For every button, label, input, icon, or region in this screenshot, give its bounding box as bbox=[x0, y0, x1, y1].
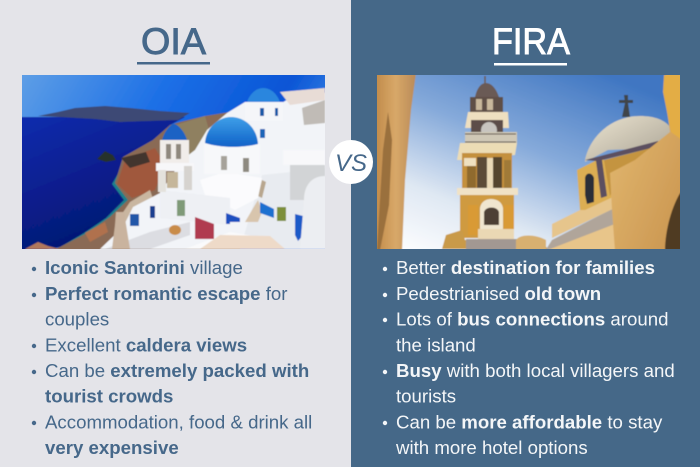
text block: Fira bullet list: tourists bbox=[396, 386, 456, 407]
large blue dome church bbox=[204, 144, 260, 174]
parasol bbox=[112, 212, 130, 249]
heading: FIRA: FIRA bbox=[492, 20, 570, 62]
bell tower bbox=[160, 140, 189, 164]
text block: Oia bullet list: tourist crowds bbox=[45, 386, 173, 407]
VS badge: VS bbox=[335, 150, 367, 177]
distant island bbox=[38, 106, 190, 122]
foreground sandstone wall bbox=[610, 73, 682, 251]
text block: Oia bullet list: couples bbox=[45, 309, 109, 330]
white town bbox=[100, 92, 330, 249]
text block: Oia bullet list: Can be extremely packed with bbox=[45, 360, 309, 381]
small dome church top bbox=[246, 101, 284, 105]
text block: Fira bullet list: Pedestrianised old town bbox=[396, 283, 601, 304]
left building bbox=[375, 73, 416, 251]
text block: Fira bullet list: Can be more affordable to stay bbox=[396, 411, 663, 432]
rock in sea bbox=[97, 151, 116, 162]
terraces bbox=[105, 222, 190, 249]
panel: Oia background bbox=[0, 0, 351, 467]
text block: Oia bullet list: Excellent caldera views bbox=[45, 334, 247, 355]
photo: Fira bell tower and domed church bbox=[375, 73, 682, 251]
text block: Fira bullet list: Better destination for families bbox=[396, 257, 655, 278]
panel: Fira background bbox=[351, 0, 700, 467]
right arched building bbox=[300, 176, 325, 238]
planter bbox=[277, 207, 286, 221]
text block: Fira bullet list bbox=[383, 257, 675, 458]
sea bbox=[20, 117, 185, 251]
church dome and cross bbox=[585, 116, 671, 162]
lower roofs bbox=[465, 238, 517, 249]
blue details bbox=[130, 214, 139, 226]
heading: OIA: OIA bbox=[141, 20, 206, 62]
text block: Fira bullet list: Busy with both local villagers and bbox=[396, 360, 675, 381]
text block: Fira bullet list: the island bbox=[396, 334, 476, 355]
text block: Oia bullet list: Perfect romantic escape for bbox=[45, 283, 287, 304]
text block: Oia bullet list: Iconic Santorini village bbox=[45, 257, 243, 278]
church body bbox=[577, 157, 615, 210]
text block: Oia bullet list: very expensive bbox=[45, 437, 179, 458]
VS badge bbox=[329, 140, 373, 184]
text block: Fira bullet list: with more hotel options bbox=[395, 437, 588, 458]
text block: Oia bullet list: Accommodation, food & drink all bbox=[45, 411, 312, 432]
red railing bbox=[195, 217, 214, 239]
bell tower bbox=[442, 76, 548, 249]
text block: Fira bullet list: Lots of bus connections around bbox=[396, 309, 668, 330]
photo: Oia village with blue domes over the caldera bbox=[20, 73, 330, 251]
cliff bbox=[50, 110, 240, 251]
text block: Oia bullet list bbox=[32, 257, 312, 458]
